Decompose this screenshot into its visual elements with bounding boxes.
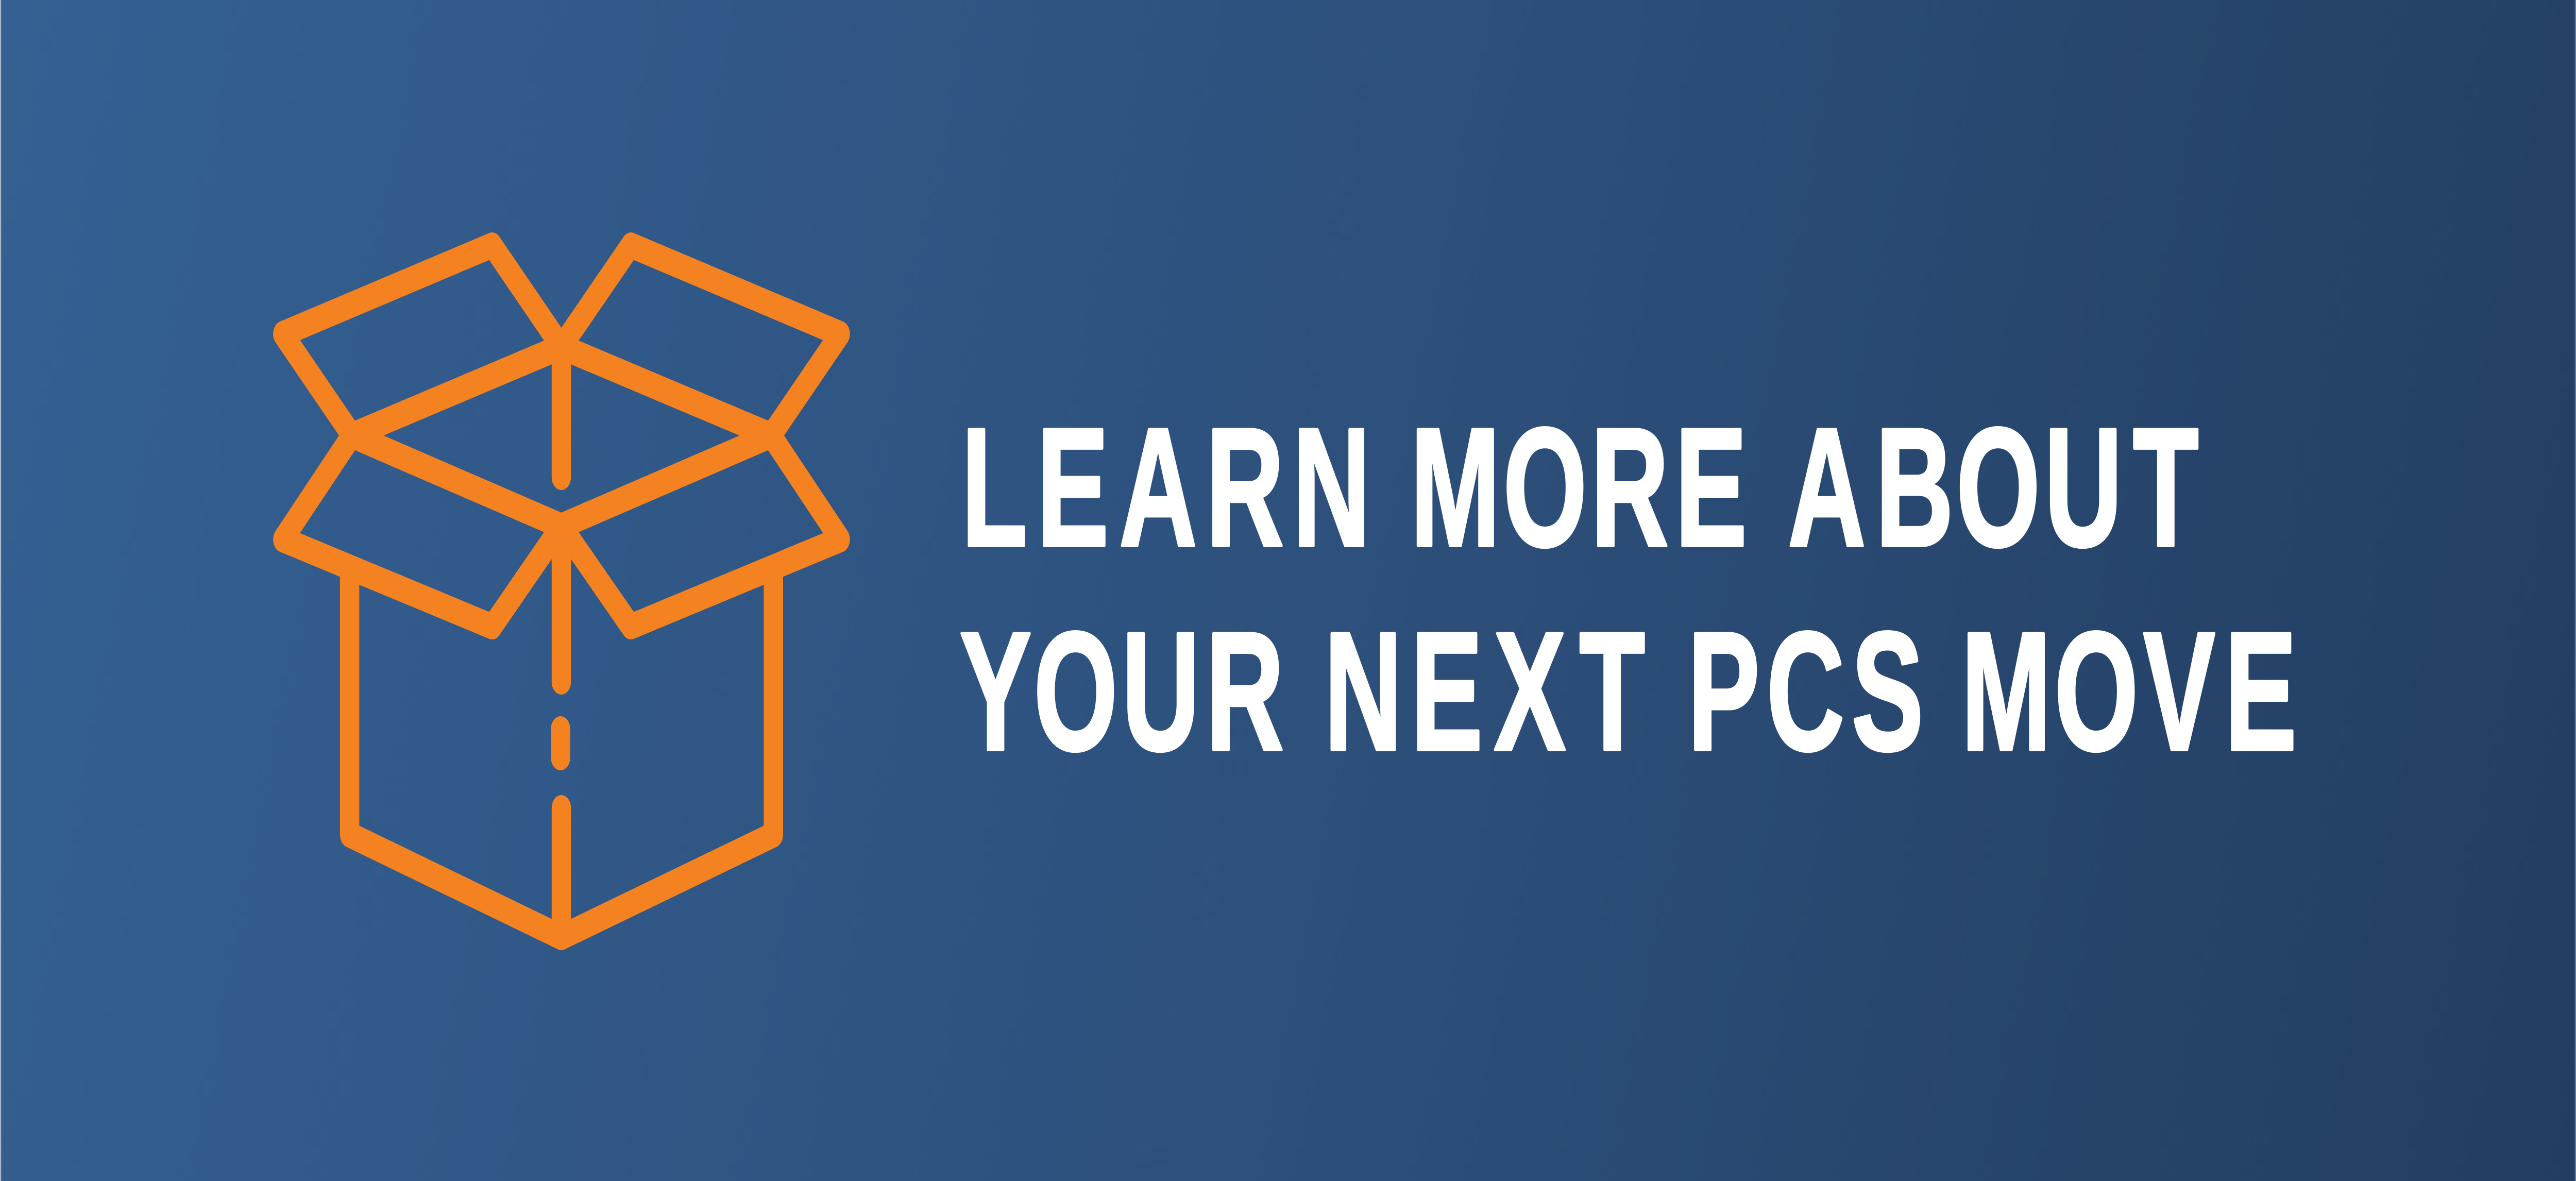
- lower centre seam: [549, 808, 574, 937]
- box top-right flap: [562, 245, 840, 435]
- box lower-left flap: [283, 435, 562, 627]
- heading line 1: LEARN MORE ABOUT: [961, 393, 2199, 582]
- middle centre seam: [549, 526, 574, 682]
- upper centre seam: [549, 347, 574, 477]
- heading: [960, 393, 2297, 786]
- box top-left flap: [283, 245, 562, 435]
- icon: open cardboard box: [283, 245, 840, 937]
- box body sides: [350, 569, 773, 937]
- box lower-right flap: [562, 435, 840, 627]
- centre seam dash: [548, 729, 573, 757]
- heading line 2: YOUR NEXT PCS MOVE: [960, 597, 2297, 786]
